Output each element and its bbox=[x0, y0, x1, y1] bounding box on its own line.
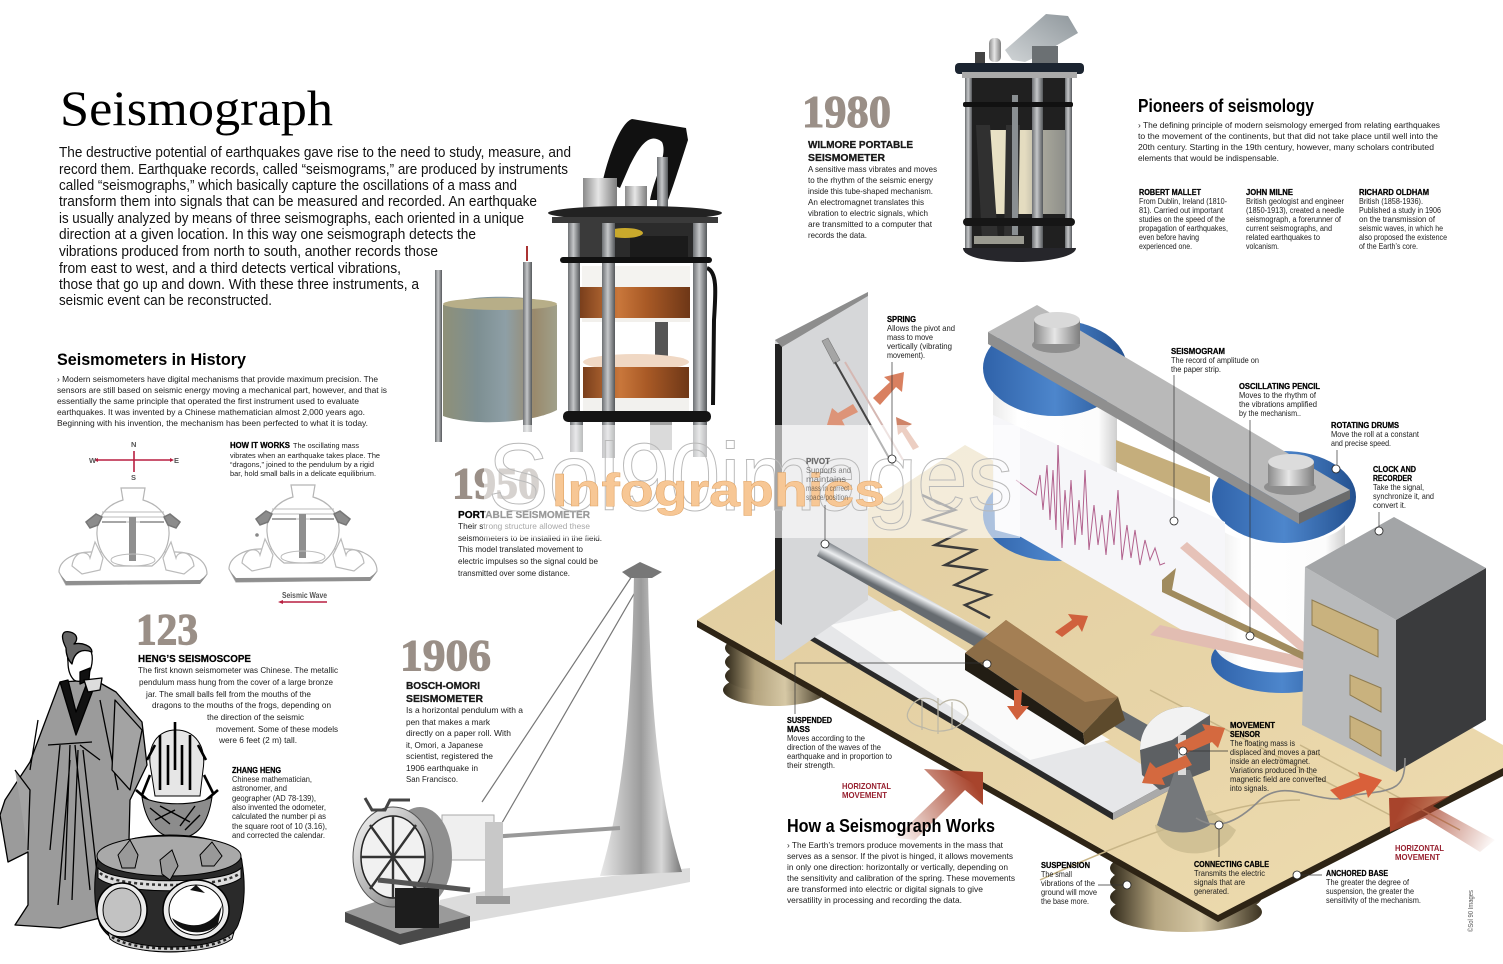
knob: rear bbox=[1032, 312, 1080, 353]
label: suspended mass: SUSPENDED bbox=[787, 716, 832, 725]
big horizontal arrow left bbox=[895, 769, 983, 840]
label: movement sensor bbox=[1179, 721, 1326, 793]
Richard Oldham: seismic waves, in which he bbox=[1359, 224, 1443, 233]
1950 section bbox=[452, 459, 602, 578]
text: how it works description: › The Earth’s tremors produce movements in the mass that bbox=[787, 840, 1004, 850]
year: 123 bbox=[136, 605, 198, 654]
label: suspended mass: MASS bbox=[787, 725, 811, 734]
text: how it works description: in only one direction: horizontally or vertically, depending on bbox=[787, 862, 1008, 872]
seismogram trace bbox=[1016, 445, 1165, 565]
description: An electromagnet translates this bbox=[808, 197, 924, 207]
label: movement sensor: into signals. bbox=[1230, 783, 1269, 793]
1906 section bbox=[400, 631, 523, 784]
description: Is a horizontal pendulum with a bbox=[406, 705, 523, 715]
intro text bbox=[59, 145, 571, 309]
intro text: is usually analyzed by means of three seismographs, each oriented in a unique bbox=[59, 211, 524, 227]
heading: SEISMOMETER bbox=[406, 694, 483, 705]
text: how it works description bbox=[787, 840, 1015, 905]
diagram: how a seismograph works bbox=[697, 292, 1503, 932]
label: spring: movement). bbox=[887, 350, 925, 360]
Richard Oldham bbox=[1359, 188, 1447, 251]
label: rotating drums: Move the roll at a constant bbox=[1331, 429, 1420, 439]
John Milne: British geologist and engineer bbox=[1246, 197, 1344, 206]
label: horizontal movement left: MOVEMENT bbox=[842, 790, 888, 800]
label: spring: Allows the pivot and bbox=[887, 323, 955, 333]
top arm bbox=[988, 305, 1350, 524]
arrow up bbox=[896, 417, 919, 450]
description: vibration to electric signals, which bbox=[808, 208, 928, 218]
body text: essentially the same principle that operated the first instrument used to evaluate bbox=[57, 396, 359, 406]
description: jar. The small balls fell from the mouths of the bbox=[145, 689, 311, 699]
description: inside this tube-shaped mechanism. bbox=[808, 186, 933, 196]
label: spring: SPRING bbox=[887, 315, 916, 324]
John Milne: (1850-1913), created a needle bbox=[1246, 206, 1344, 215]
big horizontal arrow right bbox=[1389, 796, 1495, 852]
label: clock and recorder: convert it. bbox=[1373, 500, 1406, 510]
description bbox=[808, 164, 937, 240]
description: the direction of the seismic bbox=[207, 712, 305, 722]
main instrument body bbox=[548, 119, 722, 458]
label: clock and recorder bbox=[1373, 465, 1434, 535]
label: suspension: vibrations of the bbox=[1041, 878, 1095, 888]
label: suspended mass: direction of the waves of the bbox=[787, 742, 881, 752]
description: The first known seismometer was Chinese. The metallic bbox=[138, 665, 339, 675]
description: scientist, registered the bbox=[406, 751, 493, 761]
year: 1906 bbox=[400, 631, 491, 680]
label: spring bbox=[887, 315, 955, 463]
inner floor bbox=[776, 590, 1170, 820]
diagram: seismoscope at rest bbox=[59, 488, 207, 585]
description: were 6 feet (2 m) tall. bbox=[218, 735, 297, 745]
label: suspension: the base more. bbox=[1041, 896, 1089, 906]
John Milne: seismograph, a forerunner of bbox=[1246, 215, 1342, 224]
body text: earthquakes. It was invented by a Chinese mathematician almost 2,000 years ago. bbox=[57, 407, 365, 417]
Zhang Heng bio: calculated the number pi as bbox=[232, 812, 326, 821]
intro text: direction at a given location. In this way one seismograph detects the bbox=[59, 227, 476, 243]
intro: to the movement of the continents, but that did not take place until well into the bbox=[1138, 131, 1438, 141]
vibration arrows bbox=[827, 372, 1382, 800]
body text: › Modern seismometers have digital mechanisms that provide maximum precision. The bbox=[57, 374, 378, 384]
label: clock and recorder: synchronize it, and bbox=[1373, 491, 1434, 501]
intro text: from east to west, and a third detects vertical vibrations, bbox=[59, 261, 401, 277]
watermark: Sol 90 images: Sol90images bbox=[488, 424, 1013, 531]
compass: N bbox=[131, 440, 136, 449]
section: Pioneers of seismology bbox=[1138, 96, 1447, 251]
label: oscillating pencil: by the mechanism.. bbox=[1239, 408, 1301, 418]
heading bbox=[406, 681, 483, 705]
compass bbox=[89, 440, 179, 482]
Richard Oldham: of the Earth’s core. bbox=[1359, 242, 1418, 251]
front drum bbox=[1211, 451, 1356, 693]
intro: › The defining principle of modern seismology emerged from relating earthquakes bbox=[1138, 120, 1440, 130]
how it works text: “dragons,” joined to the pendulum by a rigid bbox=[230, 460, 374, 469]
compass: E bbox=[174, 456, 179, 465]
label: oscillating pencil: the vibrations amplified bbox=[1239, 399, 1317, 409]
label: suspension bbox=[1041, 861, 1131, 906]
sensor arrows bbox=[1142, 724, 1225, 785]
label: oscillating pencil: Moves to the rhythm of bbox=[1239, 390, 1317, 400]
label: rotating drums: ROTATING DRUMS bbox=[1331, 421, 1400, 430]
Zhang Heng bio: also invented the odometer, bbox=[232, 803, 326, 812]
John Milne: JOHN MILNE bbox=[1246, 188, 1294, 197]
description: Their strong structure allowed these bbox=[458, 521, 590, 531]
label: horizontal movement left: HORIZONTAL bbox=[842, 781, 891, 791]
heading: BOSCH-OMORI bbox=[406, 681, 480, 692]
intro text: called “seismographs,” which basically capture the oscillations of a mass and bbox=[59, 178, 517, 194]
heading: WILMORE PORTABLE bbox=[808, 140, 913, 151]
heading: HENG’S SEISMOSCOPE bbox=[138, 654, 251, 665]
paper strip bbox=[993, 415, 1225, 655]
description: seismometers to be installed in the field. bbox=[458, 533, 602, 543]
Robert Mallet: experienced one. bbox=[1139, 242, 1192, 251]
how it works text bbox=[230, 441, 380, 478]
label: clock and recorder: Take the signal, bbox=[1373, 482, 1424, 492]
Robert Mallet: propagation of earthquakes, bbox=[1139, 224, 1228, 233]
label: movement sensor: The floating mass is bbox=[1230, 738, 1295, 748]
intro text: The destructive potential of earthquakes gave rise to the need to study, measure, and bbox=[59, 145, 571, 161]
label: pivot: maintains bbox=[806, 474, 846, 484]
body text: sensors are still based on seismic energy moving a mechanical part, however, and that is bbox=[57, 385, 387, 395]
year: 1980 bbox=[802, 87, 891, 137]
connecting cable bbox=[1196, 758, 1405, 824]
vessel bbox=[136, 722, 218, 838]
how it works text: vibrates when an earthquake takes place. The bbox=[230, 451, 380, 460]
heading: Pioneers of seismology bbox=[1138, 96, 1314, 116]
Robert Mallet: even before having bbox=[1139, 233, 1199, 242]
text: how it works description: serves as a sensor. If the pivot is hinged, it allows movements bbox=[787, 851, 1013, 861]
metal cup bbox=[435, 246, 557, 442]
heading: Seismometers in History bbox=[57, 350, 247, 369]
description: 1906 earthquake in bbox=[406, 763, 478, 773]
arrow on mass up bbox=[1055, 614, 1088, 637]
intro text: seismic event can be reconstructed. bbox=[59, 293, 272, 309]
label: anchored base: sensitivity of the mechanism. bbox=[1326, 895, 1421, 905]
base plate bbox=[697, 445, 1503, 922]
label: clock and recorder: RECORDER bbox=[1373, 474, 1412, 483]
Zhang Heng bio: Chinese mathematician, bbox=[232, 775, 312, 784]
compass: W bbox=[89, 456, 97, 465]
right floor arrow bbox=[1330, 772, 1382, 800]
intro text: those that go up and down. With these three instruments, a bbox=[59, 277, 420, 293]
heading: How a Seismograph Works: How a Seismograph Works bbox=[787, 816, 995, 836]
label: suspended mass bbox=[787, 660, 991, 770]
description: movement. Some of these models bbox=[216, 724, 338, 734]
Zhang Heng bio bbox=[232, 766, 327, 840]
label: connecting cable: signals that are bbox=[1194, 877, 1245, 887]
heading: SEISMOMETER bbox=[808, 153, 885, 164]
body text: Beginning with his invention, the mechanism has been perfected to what it is today. bbox=[57, 418, 368, 428]
label: horizontal movement right: HORIZONTAL bbox=[1395, 843, 1444, 853]
intro: elements that would be indispensable. bbox=[1138, 153, 1279, 163]
Zhang Heng bio: geographer (AD 78-139), bbox=[232, 794, 316, 803]
label: seismogram: the paper strip. bbox=[1171, 364, 1221, 374]
Richard Oldham: British (1858-1936). bbox=[1359, 197, 1423, 206]
description: transmitted over some distance. bbox=[458, 568, 570, 578]
description: it, Omori, a Japanese bbox=[406, 740, 483, 750]
John Milne: volcanism. bbox=[1246, 242, 1279, 251]
Robert Mallet: 81). Carried out important bbox=[1139, 206, 1224, 215]
text: how it works description: versatility in processing and recording the data. bbox=[787, 895, 962, 905]
label: pivot: PIVOT bbox=[806, 457, 830, 466]
knob: front bbox=[1264, 454, 1316, 495]
intro text: record them. Earthquake records, called “seismograms,” are produced by instruments bbox=[59, 162, 568, 178]
photo: 1950 portable seismometer bbox=[435, 119, 722, 458]
label: suspension: SUSPENSION bbox=[1041, 861, 1090, 870]
illustration: Heng's seismoscope on stool bbox=[95, 722, 244, 952]
label: seismogram: The record of amplitude on bbox=[1171, 355, 1259, 365]
label: anchored base: The greater the degree of bbox=[1326, 877, 1410, 887]
Robert Mallet: studies on the speed of the bbox=[1139, 215, 1225, 224]
how it works text: The oscillating mass bbox=[293, 441, 359, 450]
label: movement sensor: displaced and moves a part bbox=[1230, 747, 1321, 757]
year: 1950 bbox=[452, 459, 540, 508]
ghost coil on floor bbox=[907, 698, 968, 734]
label: movement sensor: Variations produced in the bbox=[1230, 765, 1317, 775]
photo: 1980 Wilmore portable seismometer bbox=[955, 14, 1084, 262]
label: clock and recorder: CLOCK AND bbox=[1373, 465, 1416, 474]
diagram: seismoscope in motion bbox=[229, 485, 377, 582]
label: rotating drums: and precise speed. bbox=[1331, 438, 1391, 448]
description: pen that makes a mark bbox=[406, 717, 491, 727]
label: suspended mass: Moves according to the bbox=[787, 733, 865, 743]
label: connecting cable bbox=[1194, 821, 1270, 896]
label: spring: mass to move bbox=[887, 332, 933, 342]
label: movement sensor: magnetic field are converted bbox=[1230, 774, 1326, 784]
section: Seismometers in History bbox=[57, 350, 387, 604]
label: seismogram: SEISMOGRAM bbox=[1171, 347, 1225, 356]
stool bbox=[95, 835, 244, 952]
back drum bbox=[983, 320, 1127, 561]
seismic wave arrow: Seismic Wave bbox=[282, 591, 327, 600]
description: San Francisco. bbox=[406, 774, 458, 784]
description bbox=[406, 705, 523, 784]
pivot leader bbox=[821, 505, 829, 548]
label: suspended mass: their strength. bbox=[787, 760, 835, 770]
how it works text: bar, hold small balls in a delicate equilibrium. bbox=[230, 469, 376, 478]
arrow on mass down bbox=[1007, 690, 1029, 720]
label: suspension: The small bbox=[1041, 869, 1072, 879]
label: horizontal movement right: MOVEMENT bbox=[1395, 852, 1441, 862]
clock and recorder box bbox=[1302, 517, 1486, 772]
label: connecting cable: Transmits the electric bbox=[1194, 868, 1266, 878]
label: oscillating pencil: OSCILLATING PENCIL bbox=[1239, 382, 1320, 391]
label: horizontal movement left bbox=[842, 781, 891, 800]
Zhang Heng bio: the square root of 10 (3.16), bbox=[232, 822, 327, 831]
label: anchored base: suspension, the greater the bbox=[1326, 886, 1414, 896]
seismic wave arrow bbox=[278, 591, 327, 604]
John Milne: current seismographs, and bbox=[1246, 224, 1332, 233]
description: A sensitive mass vibrates and moves bbox=[808, 164, 937, 174]
Robert Mallet: ROBERT MALLET bbox=[1139, 188, 1201, 197]
suspended mass bbox=[965, 620, 1125, 745]
label: rotating drums bbox=[1331, 421, 1420, 473]
label: horizontal movement right bbox=[1395, 843, 1444, 862]
how it works text: HOW IT WORKS bbox=[230, 441, 291, 450]
description: dragons to the mouths of the frogs, depending on bbox=[152, 700, 331, 710]
label: pivot: space/position bbox=[806, 492, 848, 502]
intro bbox=[1138, 120, 1440, 163]
Robert Mallet: From Dublin, Ireland (1810- bbox=[1139, 197, 1227, 206]
watermark bbox=[484, 424, 1020, 538]
label: suspension: ground will move bbox=[1041, 887, 1097, 897]
heading: PORTABLE SEISMOMETER bbox=[458, 510, 591, 521]
description: electric impulses so the signal could be bbox=[458, 556, 598, 566]
Robert Mallet bbox=[1139, 188, 1228, 251]
intro text: vibrations produced from north to south, another records those bbox=[59, 244, 438, 260]
label: movement sensor: MOVEMENT bbox=[1230, 721, 1275, 730]
arrow down left bbox=[827, 404, 858, 426]
Zhang Heng bio: ZHANG HENG bbox=[232, 766, 281, 775]
description: to the rhythm of the seismic energy bbox=[808, 175, 934, 185]
description: are transmitted to a computer that bbox=[808, 219, 933, 229]
label: movement sensor: inside an electromagnet. bbox=[1230, 756, 1310, 766]
John Milne: related earthquakes to bbox=[1246, 233, 1321, 242]
body text bbox=[57, 374, 387, 428]
123 section bbox=[136, 605, 339, 840]
movement sensor bbox=[1140, 707, 1210, 832]
John Milne bbox=[1246, 188, 1344, 251]
Richard Oldham: RICHARD OLDHAM bbox=[1359, 188, 1429, 197]
suspension cushions bbox=[723, 632, 1262, 932]
label: pivot: Supports and bbox=[806, 465, 851, 475]
label: oscillating pencil bbox=[1239, 382, 1320, 640]
arrow up right bbox=[873, 372, 904, 405]
heading bbox=[808, 140, 913, 164]
label: pivot: mass in correct bbox=[806, 483, 849, 493]
vertical wall bbox=[775, 292, 903, 660]
pivot rod bbox=[817, 540, 1160, 747]
label: suspended mass: earthquake and in proportion to bbox=[787, 751, 892, 761]
1980 section bbox=[802, 87, 937, 240]
intro: 20th century. Starting in the 19th century, however, many scholars contributed bbox=[1138, 142, 1434, 152]
label: movement sensor: SENSOR bbox=[1230, 730, 1260, 739]
label: anchored base bbox=[1293, 869, 1421, 905]
description bbox=[458, 521, 602, 578]
labels: how a seismograph works bbox=[787, 315, 1444, 906]
description bbox=[138, 665, 339, 745]
compass: S bbox=[131, 473, 136, 482]
intro text: transform them into signals that can be measured and recorded. An earthquake bbox=[59, 194, 537, 210]
text: how it works description: are transformed into electric or digital signals to give bbox=[787, 884, 983, 894]
description: This model translated movement to bbox=[458, 544, 583, 554]
description: records the data. bbox=[808, 230, 867, 240]
text: how it works description: the sensitivity and calibration of the spring. These movements bbox=[787, 873, 1015, 883]
Richard Oldham: on the transmission of bbox=[1359, 215, 1436, 224]
Zhang Heng bio: and corrected the calendar. bbox=[232, 831, 325, 840]
Richard Oldham: also proposed the existence bbox=[1359, 233, 1447, 242]
label: anchored base: ANCHORED BASE bbox=[1326, 869, 1389, 878]
label: spring: vertically (vibrating bbox=[887, 341, 952, 351]
oscillating pencil bbox=[1150, 542, 1325, 672]
credit: ©Sol 90 Images bbox=[1467, 890, 1475, 932]
label: connecting cable: generated. bbox=[1194, 886, 1229, 896]
Zhang Heng bio: astronomer, and bbox=[232, 784, 287, 793]
photo: 1906 Bosch-Omori seismometer bbox=[345, 562, 690, 945]
title: Seismograph bbox=[60, 80, 333, 136]
spring bbox=[922, 495, 990, 618]
Richard Oldham: Published a study in 1906 bbox=[1359, 206, 1441, 215]
watermark: Infographics: Infographics bbox=[552, 464, 885, 516]
label: seismogram bbox=[1170, 347, 1259, 525]
label: connecting cable: CONNECTING CABLE bbox=[1194, 860, 1270, 869]
description: directly on a paper roll. With bbox=[406, 728, 511, 738]
label: pivot bbox=[806, 457, 851, 502]
illustration: Zhang Heng figure bbox=[0, 632, 147, 928]
description: pendulum mass hung from the cover of a large bronze bbox=[139, 677, 333, 687]
